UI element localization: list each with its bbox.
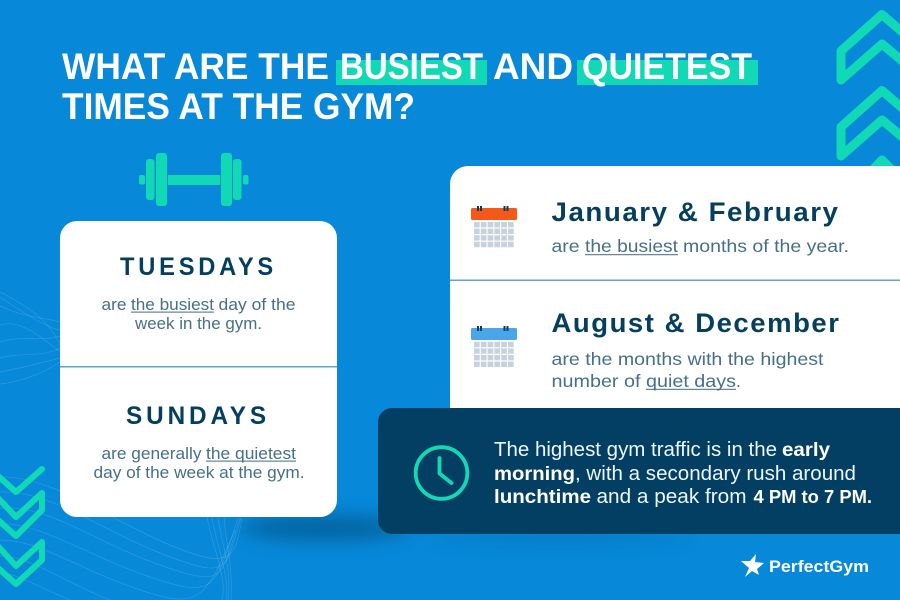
icon: logo star — [741, 554, 764, 577]
heading: Tuesdays: TUESDAYS — [120, 253, 277, 281]
text: Sundays description: are generally — [102, 445, 202, 463]
text: Tuesdays description: week in the gym. — [134, 315, 262, 333]
icon: blue calendar — [471, 326, 517, 364]
icon: orange calendar — [471, 206, 517, 244]
text: gym traffic description: morning — [494, 463, 575, 485]
icon: top right chevrons — [841, 14, 900, 232]
text: gym traffic description: , with a secondary rush around — [575, 463, 856, 485]
text: August description — [552, 349, 824, 391]
text: Tuesdays description: the busiest — [131, 296, 214, 314]
title: AND — [493, 46, 573, 87]
text: January description: the busiest — [585, 236, 678, 256]
text: Sundays description: the quietest — [206, 445, 296, 463]
icon: clock — [416, 447, 467, 499]
shadow under traffic banner — [430, 529, 690, 543]
title: QUIETEST — [582, 46, 752, 87]
shadow under left card — [240, 516, 410, 540]
text: gym traffic description: early — [782, 439, 830, 461]
text: January description: months of the year. — [683, 236, 849, 256]
text: Sundays description: day of the week at the gym. — [94, 464, 304, 482]
logo: PerfectGym — [741, 554, 869, 577]
text: gym traffic description — [494, 439, 872, 508]
title: BUSIEST — [340, 46, 483, 87]
title — [62, 46, 758, 127]
text: gym traffic description: lunchtime — [494, 486, 591, 508]
title: WHAT ARE THE — [62, 46, 329, 87]
panel: months of the year — [450, 166, 900, 420]
text: August description: number of — [552, 371, 641, 391]
icon: dumbbell — [139, 153, 248, 206]
text: Tuesdays description: day of the — [218, 296, 296, 314]
text: gym traffic description: and a peak from — [596, 486, 746, 508]
panel: gym traffic banner — [378, 408, 900, 534]
heading: Sundays: SUNDAYS — [126, 402, 270, 430]
text: gym traffic description: 4 PM to 7 PM. — [754, 487, 872, 507]
panel: days of the week — [60, 221, 337, 517]
text: Tuesdays description: are — [102, 296, 126, 314]
text: Sundays description — [94, 445, 304, 482]
text: January description: are — [552, 236, 580, 256]
heading: January and February: January & February — [552, 197, 840, 227]
logo: PerfectGym: PerfectGym — [769, 557, 869, 576]
text: January description — [552, 236, 849, 256]
text: Tuesdays description — [102, 296, 296, 333]
text: August description: quiet days — [646, 371, 736, 391]
text: gym traffic description: The highest gym traffic is in the — [494, 439, 777, 461]
text: August description: are the months with the highest — [552, 349, 824, 369]
title: TIMES AT THE GYM? — [62, 86, 415, 127]
text: August description: . — [736, 371, 741, 391]
icon: bottom left chevrons — [0, 469, 42, 584]
heading: August and December: August & December — [552, 308, 840, 338]
